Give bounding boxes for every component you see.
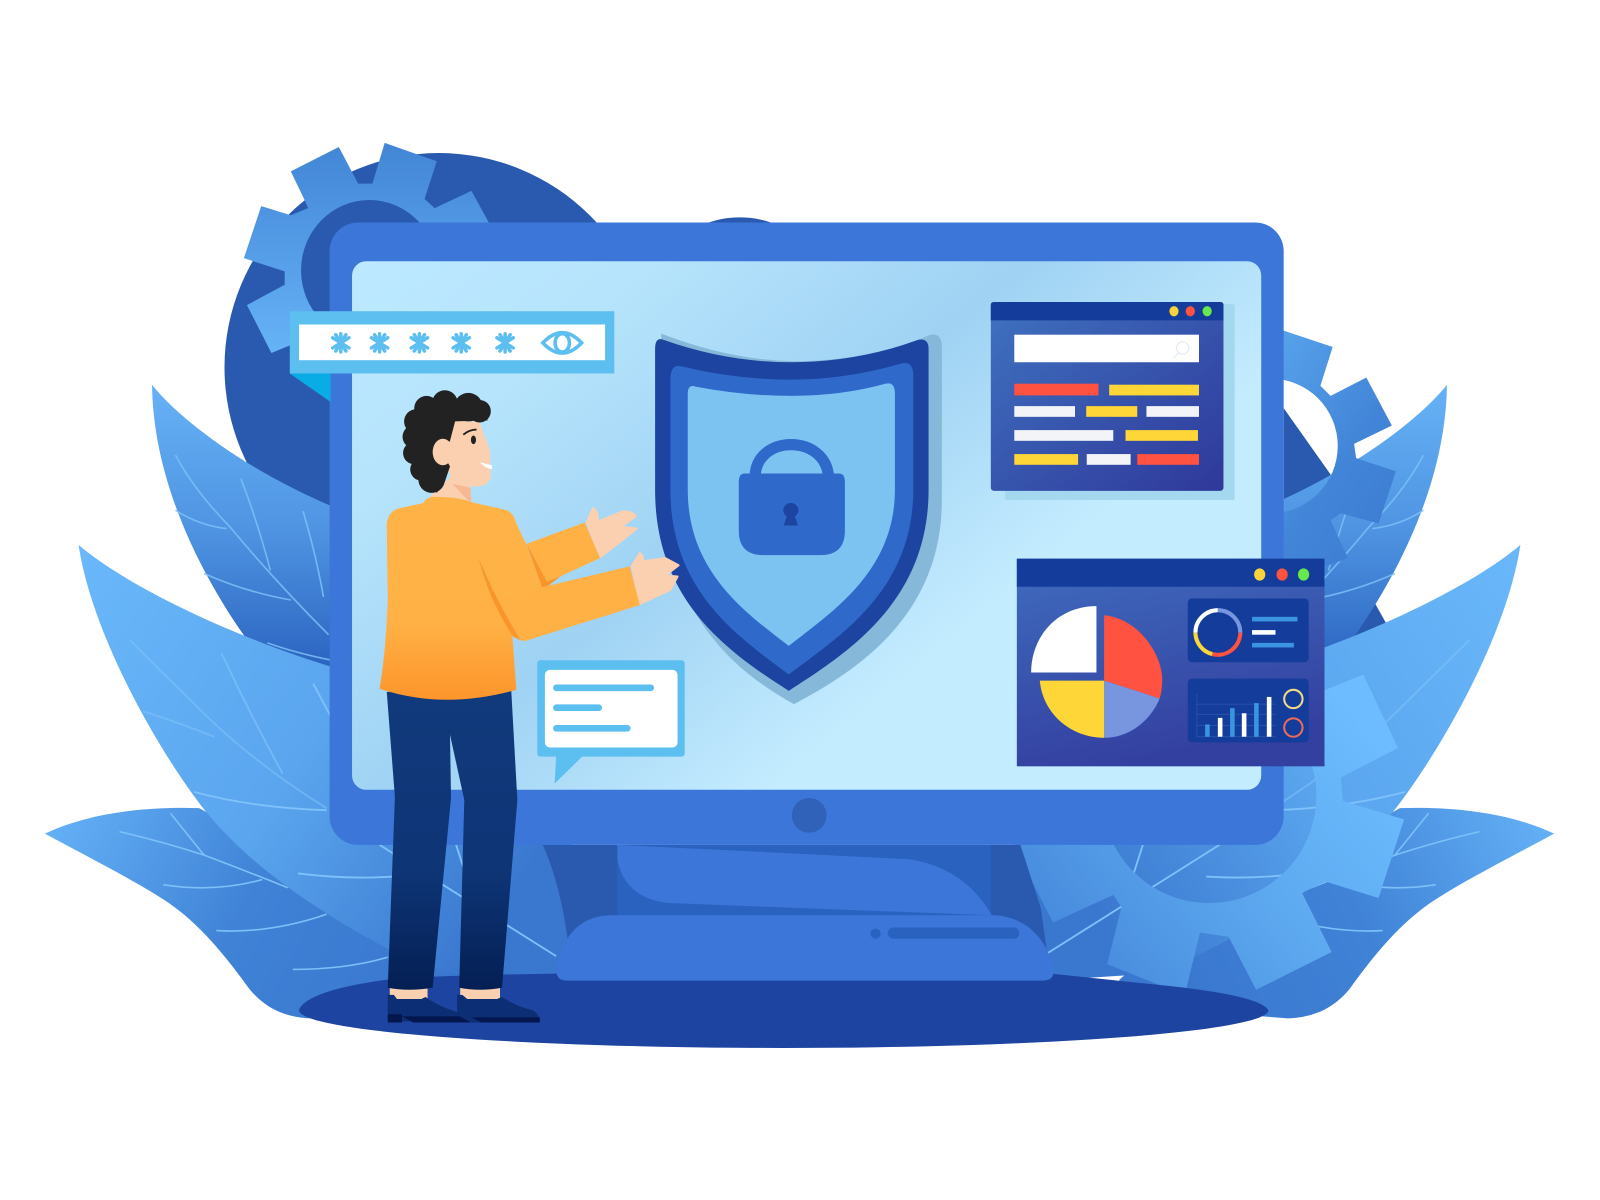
window controls	[1169, 306, 1212, 316]
background blobs	[224, 153, 1386, 663]
left mid leaf	[79, 545, 571, 982]
donut panel	[1188, 598, 1309, 662]
monitor body	[330, 222, 1284, 845]
monitor home button	[792, 798, 827, 833]
torso	[380, 497, 543, 700]
ankles	[390, 986, 500, 1000]
face	[441, 419, 491, 487]
right low leaf	[1119, 808, 1554, 1018]
sleeve fold	[479, 558, 520, 640]
window controls	[1254, 568, 1309, 581]
trousers	[387, 690, 517, 990]
speech bubble	[537, 660, 685, 784]
stand base	[556, 915, 1054, 981]
left back leaf	[152, 385, 337, 673]
right mid leaf	[1028, 545, 1520, 982]
data rows	[1014, 384, 1199, 465]
gear: top right	[1203, 331, 1396, 612]
password asterisks	[333, 334, 513, 352]
icon: eye	[543, 333, 582, 353]
window: analytics dashboard	[1017, 559, 1324, 766]
hand: upper	[587, 508, 637, 557]
bar chart panel	[1188, 679, 1309, 742]
sleeve: upper	[527, 522, 600, 590]
ear	[433, 439, 453, 465]
gear: bottom right	[1014, 674, 1404, 995]
floor ellipse	[299, 973, 1268, 1048]
search field	[1014, 335, 1199, 362]
teeth	[480, 462, 492, 469]
shield	[655, 334, 942, 704]
right back leaf	[1262, 385, 1447, 673]
left low leaf	[45, 808, 480, 1018]
person	[380, 390, 679, 1022]
neck	[430, 476, 471, 504]
hair	[403, 390, 491, 493]
monitor stand	[543, 845, 1054, 981]
shoes	[388, 995, 540, 1022]
hand: lower	[632, 553, 679, 604]
monitor screen	[352, 261, 1261, 790]
pie chart	[1031, 606, 1162, 738]
icon: padlock	[739, 445, 845, 555]
password field	[290, 311, 614, 402]
sleeve: lower	[512, 566, 640, 641]
gear: top left	[244, 143, 489, 367]
eye and brow	[463, 430, 477, 444]
window: code list panel	[991, 302, 1235, 500]
